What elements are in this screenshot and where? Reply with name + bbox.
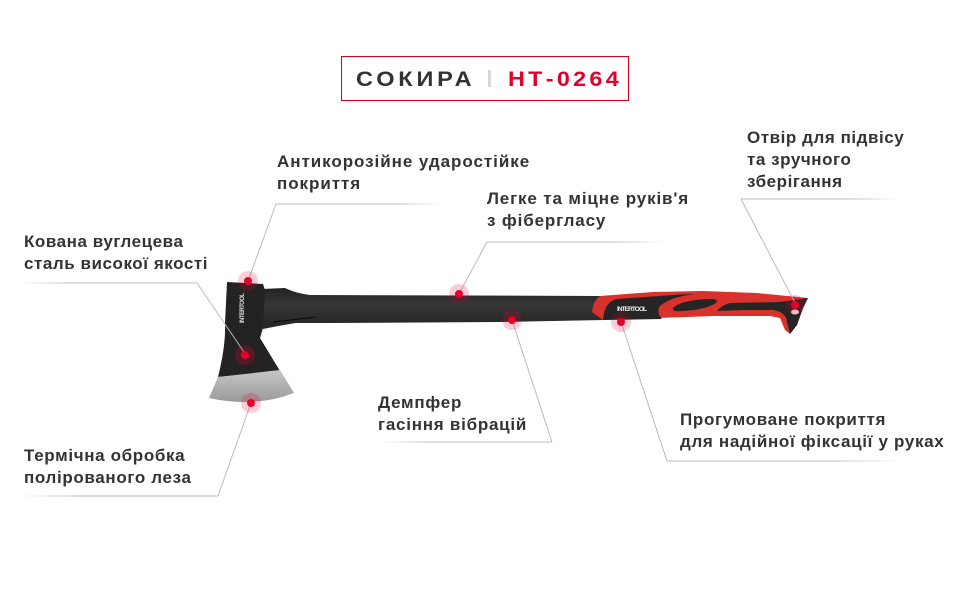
label: fiberglass handle: Легке та міцне руків'я — [487, 189, 689, 208]
marker: hanging hole — [785, 295, 805, 315]
marker: coating — [238, 271, 258, 291]
head brand label: INTERTOOL — [240, 293, 246, 323]
label: forged steel: сталь високої якості — [24, 254, 208, 273]
label: coating: Антикорозійне ударостійке — [277, 152, 530, 171]
label: forged steel: Кована вуглецева — [24, 232, 183, 251]
label: grip — [680, 410, 944, 451]
title box: НТ-0264 — [508, 68, 622, 91]
marker: blade — [241, 393, 261, 413]
grip brand label: INTERTOOL — [617, 306, 647, 313]
marker: grip — [611, 312, 631, 332]
axe handle — [262, 288, 604, 329]
marker: fiberglass handle — [449, 284, 469, 304]
label: hanging hole: зберігання — [747, 172, 843, 191]
label: blade: Термічна обробка — [24, 446, 185, 465]
label: coating: покриття — [277, 174, 361, 193]
label: grip: Прогумоване покриття — [680, 410, 886, 429]
marker: damper — [502, 310, 522, 330]
axe head — [209, 282, 294, 402]
label: damper — [378, 393, 527, 434]
label: fiberglass handle: з фібергласу — [487, 211, 606, 230]
label: hanging hole: Отвір для підвісу — [747, 128, 904, 147]
label: damper: гасіння вібрацій — [378, 415, 527, 434]
label: hanging hole — [747, 128, 904, 191]
title box — [341, 56, 629, 101]
label: blade: полірованого леза — [24, 468, 192, 487]
label: damper: Демпфер — [378, 393, 462, 412]
label: forged steel — [24, 232, 208, 273]
rubberised red grip — [592, 291, 808, 334]
leader lines — [18, 199, 902, 496]
marker: forged steel — [235, 345, 255, 365]
label: hanging hole: та зручного — [747, 150, 851, 169]
label: grip: для надійної фіксації у руках — [680, 432, 944, 451]
label: blade — [24, 446, 192, 487]
label: coating — [277, 152, 530, 193]
label: fiberglass handle — [487, 189, 689, 230]
title box: СОКИРА — [356, 68, 475, 91]
